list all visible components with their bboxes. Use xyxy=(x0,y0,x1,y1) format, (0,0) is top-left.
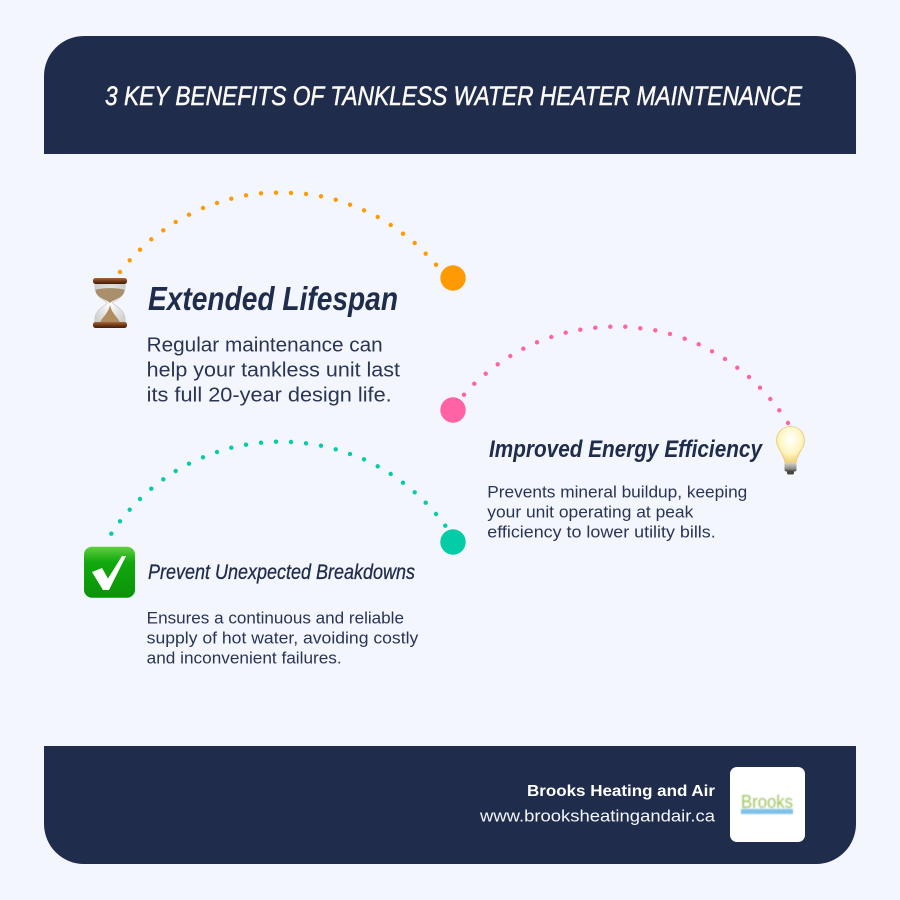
benefit: improved energy efficiency xyxy=(487,426,804,542)
text: energy efficiency description xyxy=(487,484,747,542)
text: extended lifespan description: Regular maintenance can xyxy=(147,335,383,357)
teal dotted arc xyxy=(109,440,466,555)
pink dotted arc xyxy=(440,324,790,425)
logo xyxy=(730,767,805,842)
text: energy efficiency description: your unit operating at peak xyxy=(487,504,694,522)
text: extended lifespan description: help your tankless unit last xyxy=(147,360,400,382)
text: breakdowns description: supply of hot water, avoiding costly xyxy=(147,629,419,647)
orange dotted arc xyxy=(118,190,466,291)
text: breakdowns description: Ensures a continuous and reliable xyxy=(147,609,404,627)
company name: Brooks Heating and Air xyxy=(527,783,715,800)
heading: extended lifespan: Extended Lifespan xyxy=(148,280,398,317)
header band xyxy=(44,36,856,154)
text: extended lifespan description: its full 20-year design life. xyxy=(147,385,392,407)
icon: light bulb xyxy=(776,426,804,474)
text: breakdowns description: and inconvenient failures. xyxy=(147,649,342,667)
text: energy efficiency description: efficiency to lower utility bills. xyxy=(487,524,716,542)
heading: prevent unexpected breakdowns: Prevent Unexpected Breakdowns xyxy=(148,561,415,584)
text: extended lifespan description xyxy=(147,335,400,407)
icon: hourglass xyxy=(93,278,127,328)
benefit: prevent unexpected breakdowns xyxy=(84,547,419,667)
text: breakdowns description xyxy=(147,609,419,667)
heading: improved energy efficiency: Improved Energy Efficiency xyxy=(489,436,763,463)
text: energy efficiency description: Prevents mineral buildup, keeping xyxy=(487,484,747,502)
benefit: extended lifespan xyxy=(93,278,400,407)
footer band xyxy=(44,746,856,864)
website: www.brooksheatingandair.ca xyxy=(479,806,716,826)
logo: Brooks xyxy=(741,792,793,812)
icon: green check mark xyxy=(84,547,135,598)
